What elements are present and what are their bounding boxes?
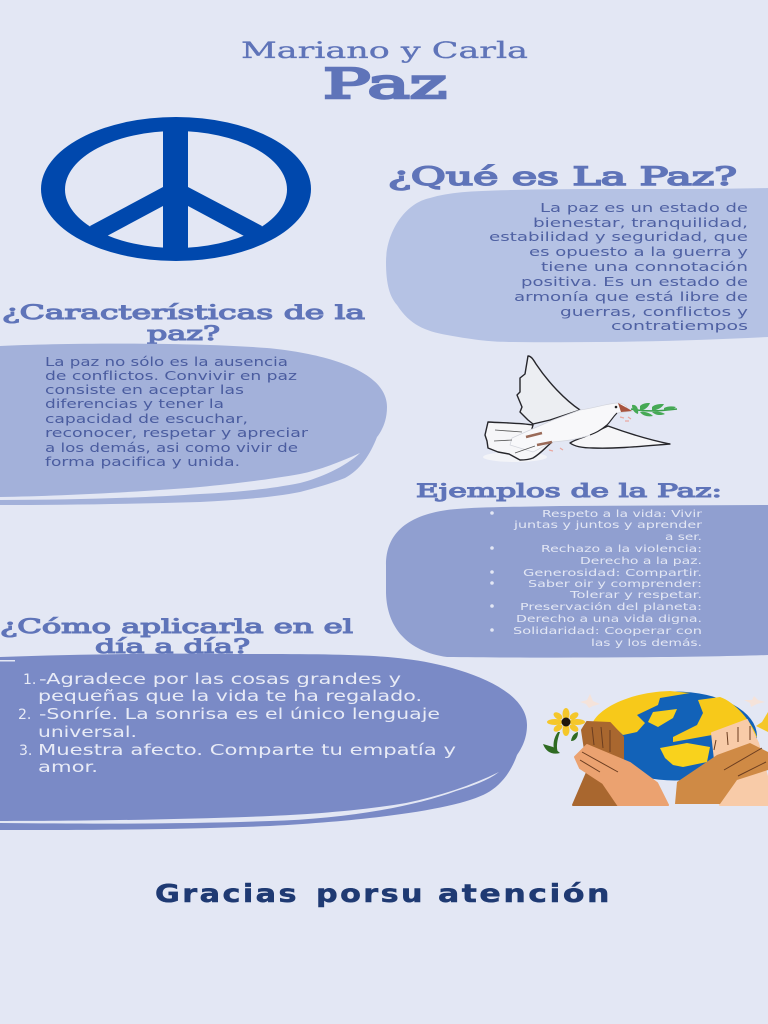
heading: ¿Características de la [2, 300, 365, 324]
panel: como aplicarla [0, 614, 527, 830]
sunflower [543, 708, 585, 754]
heading [0, 614, 353, 658]
body text: de conflictos. Convivir en paz [45, 368, 298, 383]
numbered list: 1. [23, 672, 36, 688]
blob background [0, 344, 387, 505]
body text: es opuesto a la guerra y [529, 244, 749, 259]
bullet list: Respeto a la vida: Vivir [542, 509, 703, 520]
right hand [712, 720, 768, 805]
numbered list: -Sonríe. La sonrisa es el único lenguaje [39, 705, 440, 723]
numbered list [18, 670, 456, 776]
right flower fragment [756, 712, 768, 732]
body text: consiste en aceptar las [45, 382, 244, 397]
blob background [386, 505, 768, 658]
title: Paz: Paz [323, 60, 447, 108]
bullet list: juntas y juntos y aprender [513, 520, 703, 531]
panel: ejemplos de la paz [386, 481, 768, 658]
bullet list: Derecho a una vida digna. [516, 614, 702, 625]
numbered list: -Agradece por las cosas grandes y [39, 670, 401, 688]
bullet list: Solidaridad: Cooperar con [513, 626, 702, 637]
body text: bienestar, tranquilidad, [533, 215, 748, 230]
panel: que es la paz [386, 162, 768, 342]
sparkles [580, 694, 765, 708]
body text: forma pacifica y unida. [45, 454, 240, 469]
numbered list: 2. [18, 707, 31, 723]
left hand [573, 722, 623, 805]
closing message: atención [438, 879, 612, 908]
closing message: Gracias [155, 879, 299, 908]
body text: diferencias y tener la [45, 396, 224, 411]
blob background [386, 188, 768, 342]
heading: Ejemplos de la Paz: [416, 481, 722, 502]
numbered list: 3. [19, 743, 32, 759]
globe [593, 691, 757, 780]
body text: guerras, conflictos y [560, 304, 749, 319]
heading: paz? [147, 321, 220, 345]
body text: tiene una connotación [541, 259, 748, 274]
body text: capacidad de escuchar, [45, 411, 248, 426]
bullet list: Generosidad: Compartir. [523, 568, 702, 579]
body text [489, 200, 749, 333]
body text: La paz no sólo es la ausencia [45, 354, 288, 369]
title: names: Mariano y Carla [241, 39, 528, 64]
icon: peace symbol [41, 117, 311, 261]
body text: reconocer, respetar y apreciar [45, 425, 309, 440]
numbered list: pequeñas que la vida te ha regalado. [38, 687, 422, 705]
closing message [155, 879, 612, 908]
closing message: porsu [316, 879, 425, 908]
icon: dove with olive branch [483, 356, 677, 462]
body text: positiva. Es un estado de [521, 274, 748, 289]
title block [241, 39, 528, 108]
white dash [0, 660, 15, 662]
list bullets [490, 511, 494, 632]
heading [2, 300, 365, 345]
body text: contratiempos [611, 318, 748, 333]
bullet list: Preservación del planeta: [520, 601, 702, 613]
heading: día a día? [95, 634, 250, 658]
bullet list: Rechazo a la violencia: [541, 544, 702, 555]
numbered list: universal. [38, 723, 137, 741]
heading: ¿Qué es La Paz? [388, 162, 737, 191]
numbered list: Muestra afecto. Comparte tu empatía y [38, 741, 456, 759]
finger lines [580, 726, 766, 776]
body text: La paz es un estado de [540, 200, 748, 215]
numbered list: amor. [38, 758, 98, 776]
heading: ¿Cómo aplicarla en el [0, 614, 353, 638]
panel: caracteristicas de la paz [0, 300, 387, 505]
icon: hands holding globe [543, 691, 768, 805]
body text: a los demás, asi como vivir de [45, 440, 298, 455]
body text: armonía que está libre de [514, 289, 748, 304]
body text: estabilidad y seguridad, que [489, 229, 748, 244]
bullet list: Saber oir y comprender: [528, 579, 702, 590]
bullet list: a ser. [665, 532, 702, 543]
body text [45, 354, 309, 469]
bullet list: Derecho a la paz. [580, 556, 702, 567]
blob background [0, 654, 527, 830]
bullet list [513, 509, 703, 649]
bullet list: las y los demás. [591, 637, 702, 649]
bullet list: Tolerar y respetar. [569, 590, 702, 601]
